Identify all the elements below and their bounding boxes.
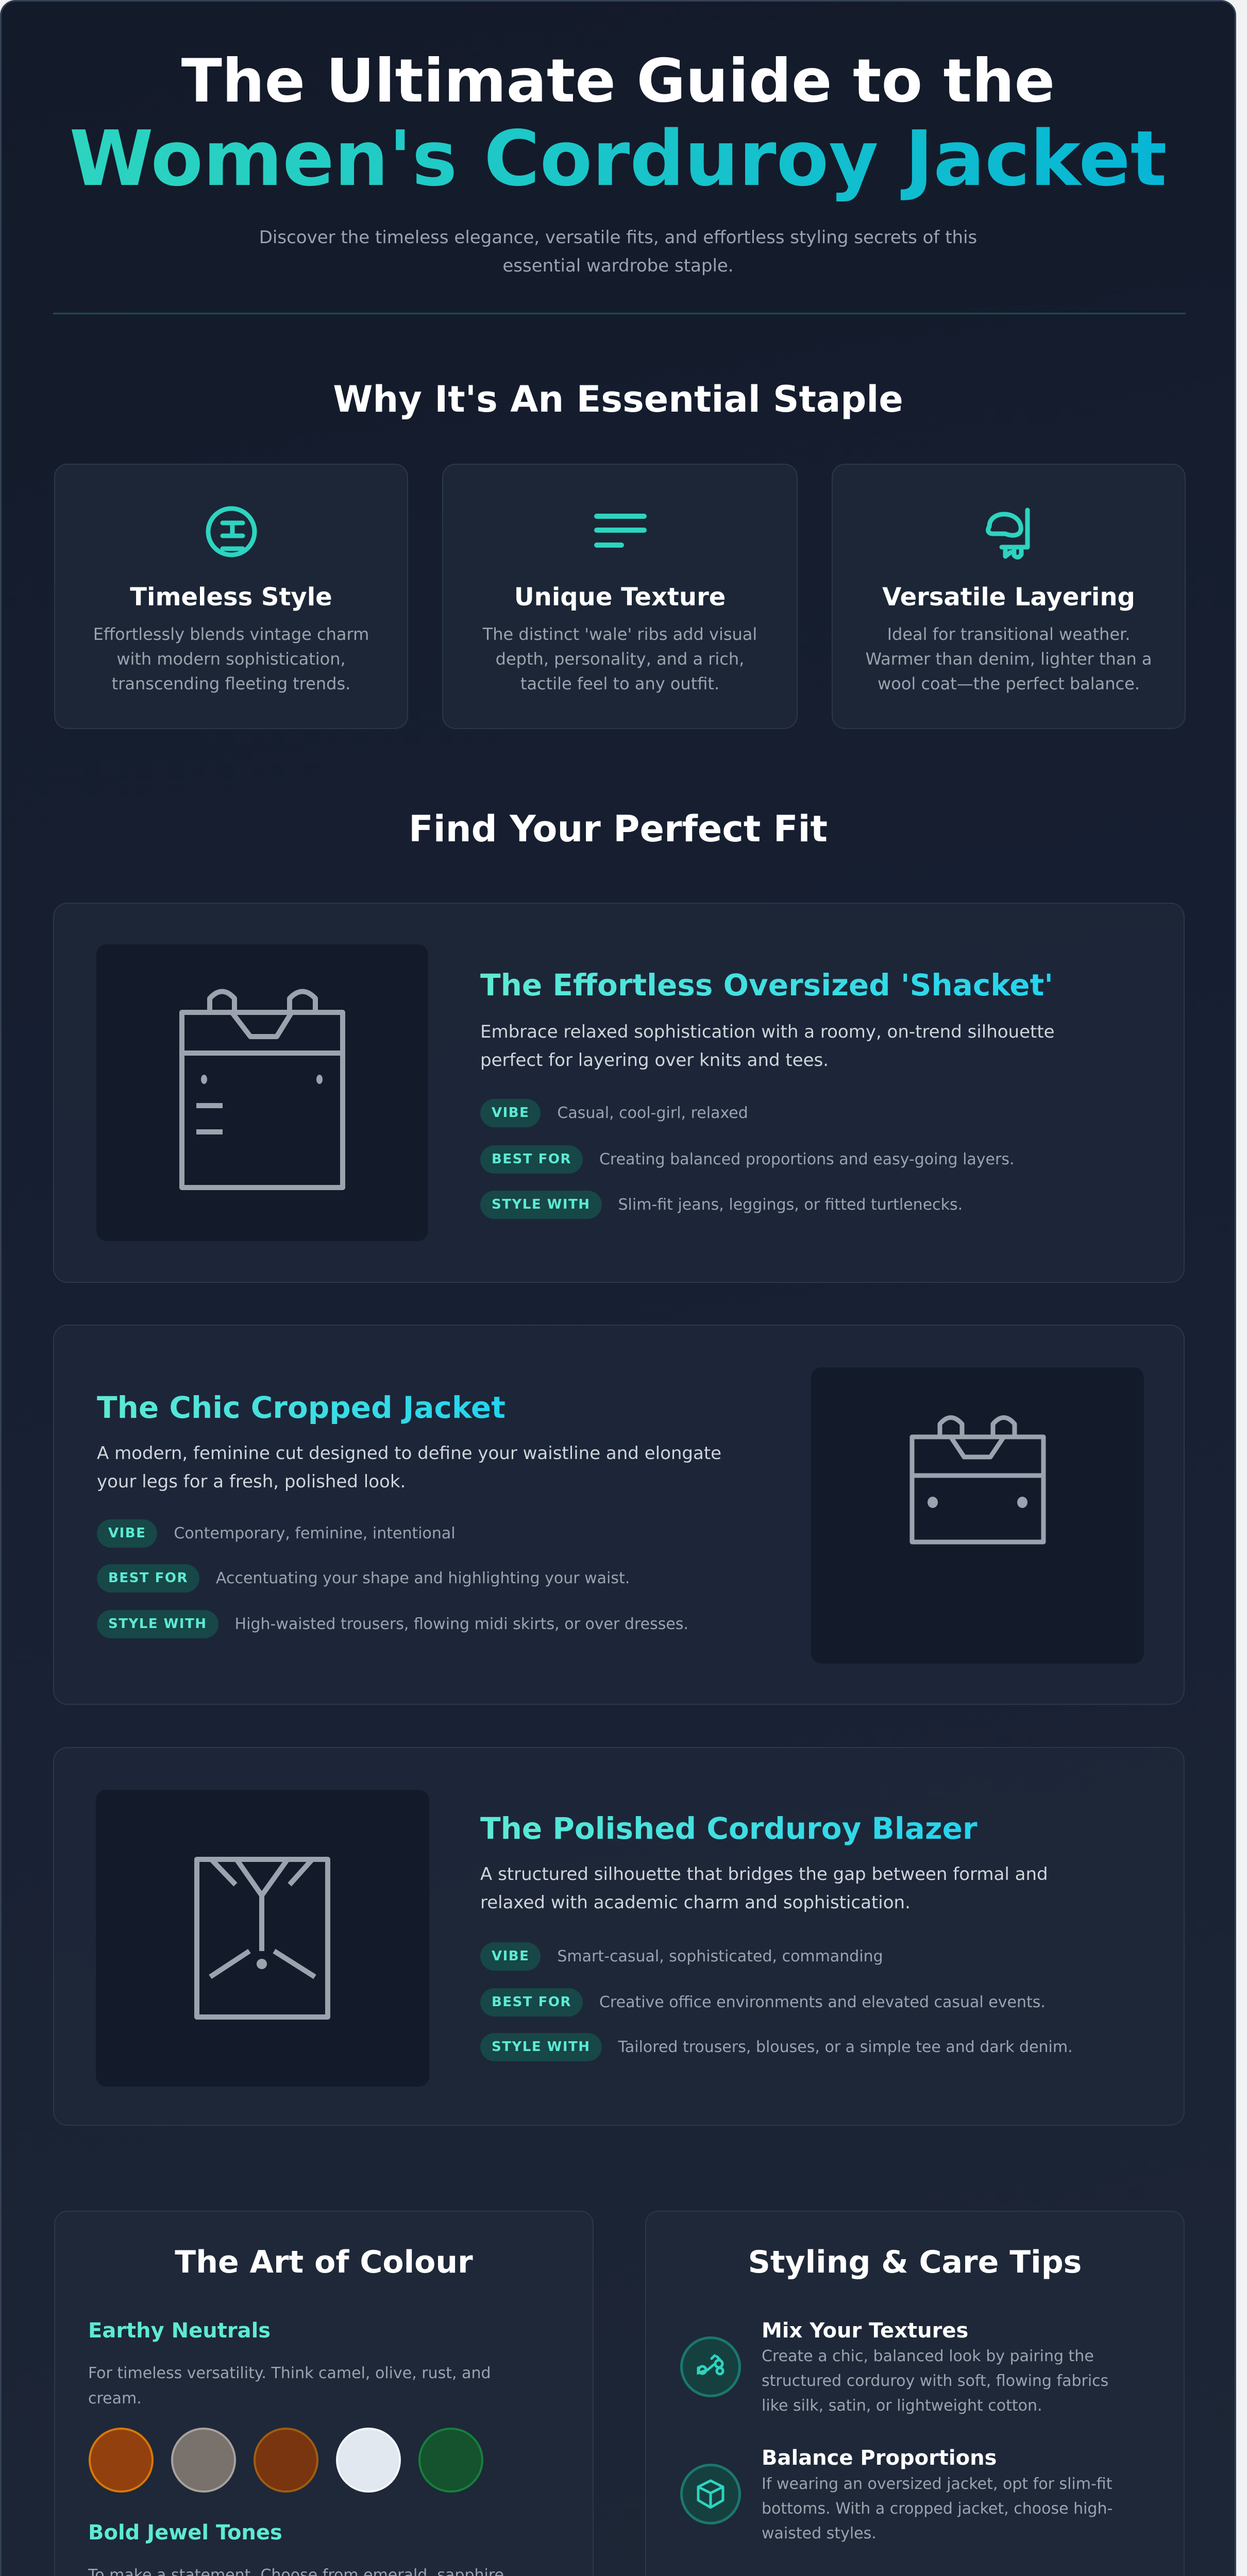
desc: Create a chic, balanced look by pairing the <box>762 2347 1094 2365</box>
icon: layering <box>986 508 1030 560</box>
title: The Chic Cropped Jacket <box>97 1390 505 1425</box>
desc <box>762 2347 1108 2415</box>
description: A modern, feminine cut designed to define your waistline and elongate <box>97 1443 721 1464</box>
tag rows <box>97 1519 688 1638</box>
tag rows: VIBE <box>108 1526 146 1541</box>
card: versatile layering: Ideal for transitional weather. <box>887 624 1130 644</box>
description: A structured silhouette that bridges the gap between formal and <box>480 1864 1048 1885</box>
description: perfect for layering over knits and tees. <box>480 1050 829 1071</box>
card: unique texture: tactile feel to any outfit. <box>520 674 719 693</box>
tip: balance proportions: bottoms. With a cropped jacket, choose high- <box>762 2500 1113 2518</box>
desc <box>88 2364 491 2408</box>
tag rows: High-waisted trousers, flowing midi skirts, or over dresses. <box>235 1615 688 1633</box>
tag rows: Casual, cool-girl, relaxed <box>557 1104 748 1122</box>
desc: structured corduroy with soft, flowing fabrics <box>762 2372 1108 2390</box>
desc: For timeless versatility. Think camel, olive, rust, and <box>88 2364 491 2382</box>
tag rows: Slim-fit jeans, leggings, or fitted turtlenecks. <box>618 1196 963 1214</box>
card: unique texture: The distinct 'wale' ribs add visual <box>483 624 757 644</box>
tag rows: STYLE WITH <box>108 1616 207 1632</box>
icon: cube <box>680 2464 741 2524</box>
title: Mix Your Textures <box>762 2319 968 2343</box>
subheading: earthy neutrals: Earthy Neutrals <box>88 2319 271 2343</box>
tag rows: BEST FOR <box>492 1151 571 1167</box>
card: versatile layering: wool coat—the perfect balance. <box>878 674 1140 693</box>
description: relaxed with academic charm and sophistication. <box>480 1892 911 1913</box>
tip: balance proportions: waisted styles. <box>762 2524 877 2543</box>
panel title: The Art of Colour <box>175 2244 473 2280</box>
title: The Effortless Oversized 'Shacket' <box>480 968 1053 1003</box>
tag rows: Accentuating your shape and highlighting your waist. <box>216 1569 630 1587</box>
tag rows <box>480 1942 1073 2061</box>
tip: balance proportions: Balance Proportions <box>762 2446 997 2470</box>
swatches: neutrals <box>89 2428 483 2493</box>
card: versatile layering: Warmer than denim, lighter than a <box>866 649 1152 669</box>
tag rows: BEST FOR <box>492 1994 571 2010</box>
description: your legs for a fresh, polished look. <box>97 1471 406 1492</box>
card: unique texture <box>442 464 798 729</box>
card: timeless style <box>54 464 408 729</box>
panel title: Styling & Care Tips <box>748 2244 1082 2280</box>
tag rows: VIBE <box>492 1948 529 1964</box>
panel: art of colour <box>54 2211 594 2576</box>
title: Timeless Style <box>130 583 332 612</box>
heading: find your fit: Find Your Perfect Fit <box>409 808 828 850</box>
fit card: oversized shacket <box>53 903 1185 1283</box>
subtitle: essential wardrobe staple. <box>502 256 734 276</box>
panel: styling & care tips <box>645 2211 1185 2576</box>
desc: Effortlessly blends vintage charm <box>93 624 369 644</box>
title: The Polished Corduroy Blazer <box>480 1811 978 1846</box>
icon: textures <box>680 2336 741 2397</box>
subtitle <box>259 227 977 276</box>
tip: balance proportions: If wearing an oversized jacket, opt for slim-fit <box>762 2475 1112 2493</box>
subtitle: Discover the timeless elegance, versatile fits, and effortless styling secrets of this <box>259 227 977 248</box>
card: unique texture: depth, personality, and a rich, <box>496 649 744 669</box>
fit card: cropped jacket <box>53 1325 1185 1705</box>
tag rows <box>480 1099 1015 1219</box>
tag rows: STYLE WITH <box>492 1197 591 1212</box>
heading: why essential: Why It's An Essential Staple <box>333 378 903 420</box>
card: versatile layering <box>832 464 1186 729</box>
icon: clock/timeless <box>206 506 257 557</box>
desc: with modern sophistication, <box>116 649 346 669</box>
tag rows: STYLE WITH <box>492 2039 591 2055</box>
icon: lines <box>594 514 647 548</box>
tag rows: Creative office environments and elevated casual events. <box>599 1993 1046 2011</box>
tag rows: VIBE <box>492 1105 529 1121</box>
desc: cream. <box>88 2389 142 2408</box>
desc <box>93 624 369 693</box>
tag rows: Tailored trousers, blouses, or a simple tee and dark denim. <box>618 2038 1073 2056</box>
desc: transcending fleeting trends. <box>112 674 350 693</box>
tag rows: Smart-casual, sophisticated, commanding <box>557 1947 883 1965</box>
description: Embrace relaxed sophistication with a roomy, on-trend silhouette <box>480 1022 1055 1042</box>
description <box>480 1022 1055 1071</box>
desc: like silk, satin, or lightweight cotton. <box>762 2397 1042 2415</box>
tag rows: BEST FOR <box>108 1570 188 1586</box>
title line 2: Women's Corduroy Jacket <box>69 114 1167 203</box>
image: blazer icon <box>96 1790 429 2087</box>
fit card: corduroy blazer <box>53 1747 1185 2126</box>
tag rows: Contemporary, feminine, intentional <box>174 1524 456 1543</box>
description <box>97 1443 721 1492</box>
subheading: jewel tones: Bold Jewel Tones <box>88 2521 282 2545</box>
card: unique texture: Unique Texture <box>514 583 726 612</box>
card: versatile layering: Versatile Layering <box>882 583 1135 612</box>
tag rows: Creating balanced proportions and easy-going layers. <box>599 1150 1015 1168</box>
image: shacket icon <box>96 944 428 1241</box>
tip: balance proportions <box>680 2446 1113 2543</box>
tip: mix textures <box>680 2319 1108 2415</box>
title line 1: The Ultimate Guide to the <box>181 46 1055 116</box>
image: cropped jacket icon <box>811 1367 1144 1664</box>
description <box>480 1864 1048 1913</box>
